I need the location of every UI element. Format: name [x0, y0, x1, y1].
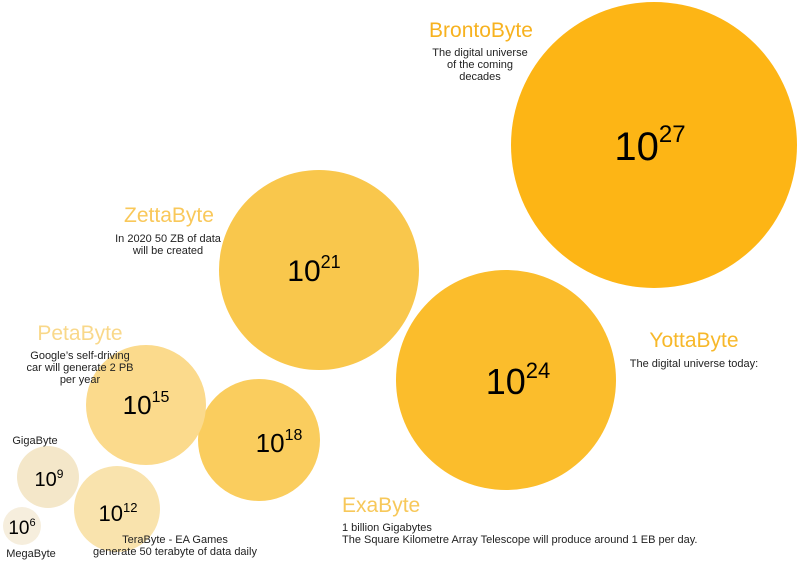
circle: YottaByte: 24	[526, 358, 550, 383]
circle: MegaByte	[3, 507, 41, 545]
circle: GigaByte: 9	[57, 467, 64, 481]
label: ZettaByte	[115, 204, 222, 257]
circle: PetaByte	[86, 345, 206, 465]
label: ExaByte: The Square Kilometre Array Telescope will produce around 1 EB per day.	[342, 534, 697, 546]
label: BrontoByte: decades	[459, 71, 501, 83]
label: MegaByte: MegaByte	[6, 548, 56, 560]
circle: MegaByte: 6	[30, 517, 36, 529]
label: TeraByte	[93, 534, 257, 558]
circle: ZettaByte: 21	[321, 252, 341, 272]
label: ZettaByte: will be created	[132, 245, 203, 257]
label: BrontoByte: The digital universe	[432, 47, 528, 59]
circle: TeraByte: 12	[123, 500, 137, 515]
label: BrontoByte	[429, 19, 533, 83]
circle: ZettaByte	[219, 170, 419, 370]
circle: MegaByte: 10	[8, 518, 30, 539]
label: YottaByte: YottaByte	[649, 329, 739, 352]
label: PetaByte: car will generate 2 PB	[26, 362, 134, 374]
label: ExaByte	[342, 494, 697, 546]
circle: PetaByte: 15	[152, 389, 169, 406]
label: GigaByte: GigaByte	[12, 435, 58, 447]
label: PetaByte: Google’s self-driving	[30, 350, 130, 362]
label: BrontoByte: of the coming	[447, 59, 513, 71]
circle: ExaByte	[198, 379, 320, 501]
label: YottaByte	[630, 329, 758, 370]
label: PetaByte: per year	[60, 374, 101, 386]
circle: YottaByte: 10	[486, 361, 526, 402]
circle: TeraByte: 10	[99, 501, 123, 526]
label: ExaByte: 1 billion Gigabytes	[342, 522, 432, 534]
circle: BrontoByte: 27	[659, 121, 686, 148]
circle: GigaByte: 10	[35, 469, 57, 491]
circle: BrontoByte: 10	[614, 125, 659, 169]
circle: ZettaByte: 10	[287, 255, 321, 288]
circle: TeraByte	[74, 466, 160, 552]
label: ExaByte: ExaByte	[342, 494, 420, 517]
label: YottaByte: The digital universe today:	[630, 358, 758, 370]
label: PetaByte	[26, 322, 134, 386]
circle: GigaByte	[17, 446, 79, 508]
circle: BrontoByte	[511, 2, 797, 288]
circle: ExaByte: 10	[256, 428, 285, 458]
label: PetaByte: PetaByte	[37, 322, 123, 345]
label: ZettaByte: In 2020 50 ZB of data	[115, 233, 222, 245]
label: TeraByte: generate 50 terabyte of data daily	[93, 546, 257, 558]
label: ZettaByte: ZettaByte	[124, 204, 214, 227]
label: BrontoByte: BrontoByte	[429, 19, 533, 42]
circle: YottaByte	[396, 270, 616, 490]
label: TeraByte: TeraByte - EA Games	[122, 534, 228, 546]
circle: PetaByte: 10	[123, 390, 152, 420]
circle: ExaByte: 18	[285, 427, 302, 444]
